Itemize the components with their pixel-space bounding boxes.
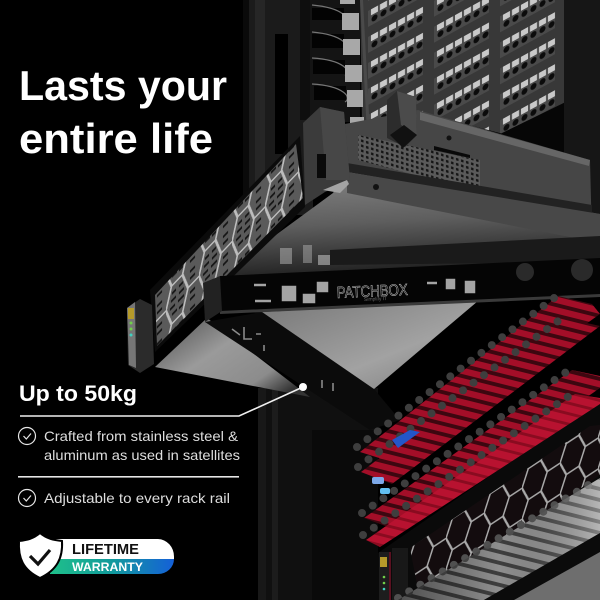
red patch cables: top group — [357, 295, 600, 484]
lifetime warranty badge: WARRANTY — [72, 560, 143, 574]
PATCHBOX rail bar: Simplify IT — [364, 296, 387, 303]
red patch cables: bottom group — [362, 368, 600, 547]
feature text: materials: Crafted from stainless steel & — [44, 428, 239, 444]
white patch cables — [398, 478, 600, 600]
chassis underside light plane — [220, 170, 600, 276]
blue LED glow — [372, 477, 390, 494]
chassis lower front strip with screw — [347, 163, 600, 243]
rack post: upper left — [243, 0, 314, 215]
server chassis top housing — [345, 110, 592, 240]
lifetime warranty badge — [19, 533, 174, 578]
server front ear: upper right — [303, 107, 350, 205]
feature text: materials: aluminum as used in satellites — [44, 447, 240, 463]
PATCHBOX rail bar: PATCHBOX — [336, 282, 408, 302]
reflected slots on underside — [280, 236, 600, 265]
divider line — [18, 476, 239, 478]
feature text: adjustable: Adjustable to every rack rail — [44, 490, 230, 506]
right rack post — [564, 0, 600, 280]
lower server face with hexagons — [378, 400, 600, 600]
slide rail: lower diagonal — [205, 312, 400, 430]
title: Lasts your — [19, 62, 227, 109]
patch cables behind panel — [310, 0, 364, 125]
rear patch panels — [360, 0, 584, 158]
lower light plane left — [155, 318, 310, 397]
PATCHBOX rail bar — [203, 258, 600, 322]
callout: load capacity heading: Up to 50kg — [19, 381, 137, 406]
callout leader line with dot — [20, 383, 307, 416]
icon: check circle 2 — [18, 490, 36, 506]
feature text: materials — [44, 428, 240, 463]
rack post: lower left — [258, 388, 378, 600]
lower server ear and lights — [379, 548, 408, 600]
dark hexagon server face — [150, 136, 305, 352]
title: entire life — [19, 115, 213, 162]
icon: check circle 1 — [18, 428, 36, 444]
lower light plane right — [262, 301, 478, 389]
server front ear: lower left with status lights — [127, 299, 154, 373]
title — [19, 62, 227, 162]
lifetime warranty badge: LIFETIME — [72, 542, 139, 558]
rail bracket on chassis — [387, 91, 417, 148]
